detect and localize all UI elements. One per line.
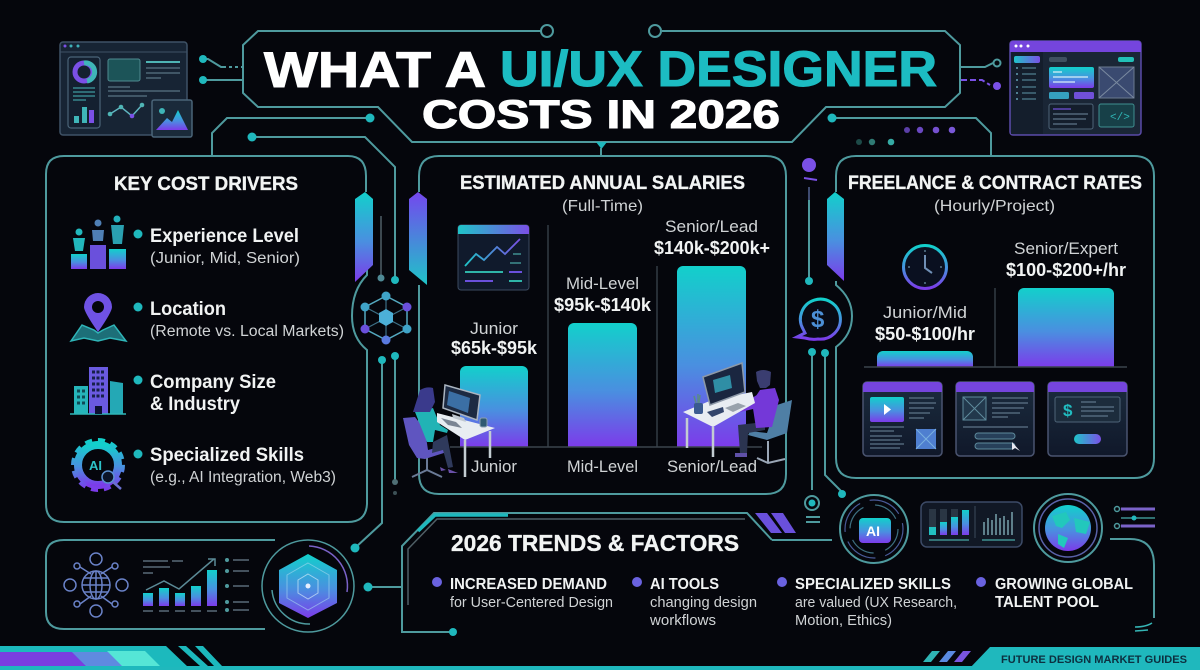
driver: location [134,299,344,340]
trend: ai tools: workflows [649,612,716,629]
bar chart: salaries: Senior/Lead [667,457,757,476]
bar chart: salaries: Junior [470,319,518,338]
card: payment window [1048,382,1127,456]
title: UI/UX DESIGNER [500,41,937,97]
trend: specialized skills: Motion, Ethics) [795,612,892,629]
trend: global talent [976,576,1133,611]
footer band right [923,647,1200,670]
icon: chart window [458,225,529,290]
trend: specialized skills: are valued (UX Research, [795,594,957,611]
panel: 2026 trends and factors frame [402,513,796,636]
driver: company size: & Industry [150,394,240,415]
bar chart: salaries: Mid-Level [567,457,638,476]
icon: top-right wireframe window: </> [1110,112,1130,124]
bar chart: hourly rates: Junior/Mid [883,303,967,322]
heading: freelance: FREELANCE & CONTRACT RATES [848,173,1142,194]
trend: ai tools [632,576,757,629]
bar chart: salaries: $65k-$95k [451,338,538,358]
icon: buildings [70,367,126,414]
icon: hexagon radar [262,540,354,632]
driver: experience level [134,226,300,267]
bar chart: hourly rates: $50-$100/hr [875,324,975,344]
title frame [243,25,960,156]
heading: salaries [460,173,745,215]
trend: increased demand: for User-Centered Design [450,594,613,611]
heading: freelance [848,173,1142,215]
trend: global talent: TALENT POOL [995,594,1099,611]
card: video window [863,382,942,456]
driver: company size [134,372,276,415]
heading: key cost drivers: KEY COST DRIVERS [114,174,298,195]
panel: freelance and contract rates [827,156,1154,478]
icon: clock [904,246,946,288]
title [264,41,937,137]
footer label: FUTURE DESIGN MARKET GUIDES [1001,654,1187,666]
driver: location: (Remote vs. Local Markets) [150,323,344,340]
trend: ai tools: changing design [650,594,757,611]
circuit connectors [199,55,1154,631]
stripes [755,513,796,533]
driver: experience level: Experience Level [150,226,299,247]
heading: freelance: (Hourly/Project) [934,198,1055,215]
icon: location pin [71,293,126,341]
trend: increased demand: INCREASED DEMAND [450,576,607,593]
icon: top-right wireframe window [1010,41,1141,135]
driver: location: Location [150,299,226,320]
illustration: woman at desk [403,385,495,477]
icon: globe [1034,494,1102,562]
icon: AI gear: AI [89,458,102,473]
driver: specialized skills: Specialized Skills [150,445,304,466]
title: WHAT A [264,42,486,98]
bar chart: salaries: $95k-$140k [554,295,652,315]
driver: experience level: (Junior, Mid, Senior) [150,250,300,267]
icon: dollar chat bubble: $ [811,306,825,333]
driver: specialized skills: (e.g., AI Integration, Web3) [150,469,336,486]
trend: ai tools: AI TOOLS [650,576,719,593]
bar chart: hourly rates: $100-$200+/hr [1006,260,1126,280]
heading: salaries: (Full-Time) [562,198,643,215]
panel: bottom left graphics [46,540,275,629]
icon: sliders [1114,506,1155,528]
heading: trends: 2026 TRENDS & FACTORS [451,530,739,556]
driver: specialized skills [134,445,336,486]
trend: specialized skills [777,576,957,629]
icon: dollar chat bubble [797,299,840,339]
icon: dashboard chart card [921,502,1022,547]
card: wireframe window [956,382,1034,456]
title: COSTS IN 2026 [422,93,780,137]
icon: global network [64,553,128,617]
panel: estimated annual salaries [409,156,786,494]
bar chart: salaries: Senior/Lead [665,217,758,236]
illustration: man at desk [683,363,792,463]
heading: salaries: ESTIMATED ANNUAL SALARIES [460,173,745,194]
ribbon: centre panel [409,192,427,285]
trend: global talent: GROWING GLOBAL [995,576,1133,593]
ribbon: right panel [827,192,844,281]
icon: experience level [71,216,126,269]
icon: AI chip [840,495,908,563]
bar chart: salaries: Junior [471,457,517,476]
trend: specialized skills: SPECIALIZED SKILLS [795,576,951,593]
icon: network hub [360,292,412,344]
bar chart: salaries: Mid-Level [566,274,639,293]
trend: increased demand [432,576,613,611]
icon: AI chip: AI [866,523,880,539]
card: payment window: $ [1063,401,1073,420]
icon: top-left dashboard window [60,42,192,137]
driver: company size: Company Size [150,372,276,393]
icon: AI gear [74,440,122,490]
bar chart: hourly rates: Senior/Expert [1014,239,1118,258]
icon: growth chart [143,558,249,612]
bar chart: hourly rates [864,239,1127,367]
panel: key cost drivers [46,156,373,522]
bar chart: salaries: $140k-$200k+ [654,238,770,258]
bar chart: salaries [450,217,770,476]
footer band left [0,646,1200,670]
ribbon: left panel [355,192,373,282]
